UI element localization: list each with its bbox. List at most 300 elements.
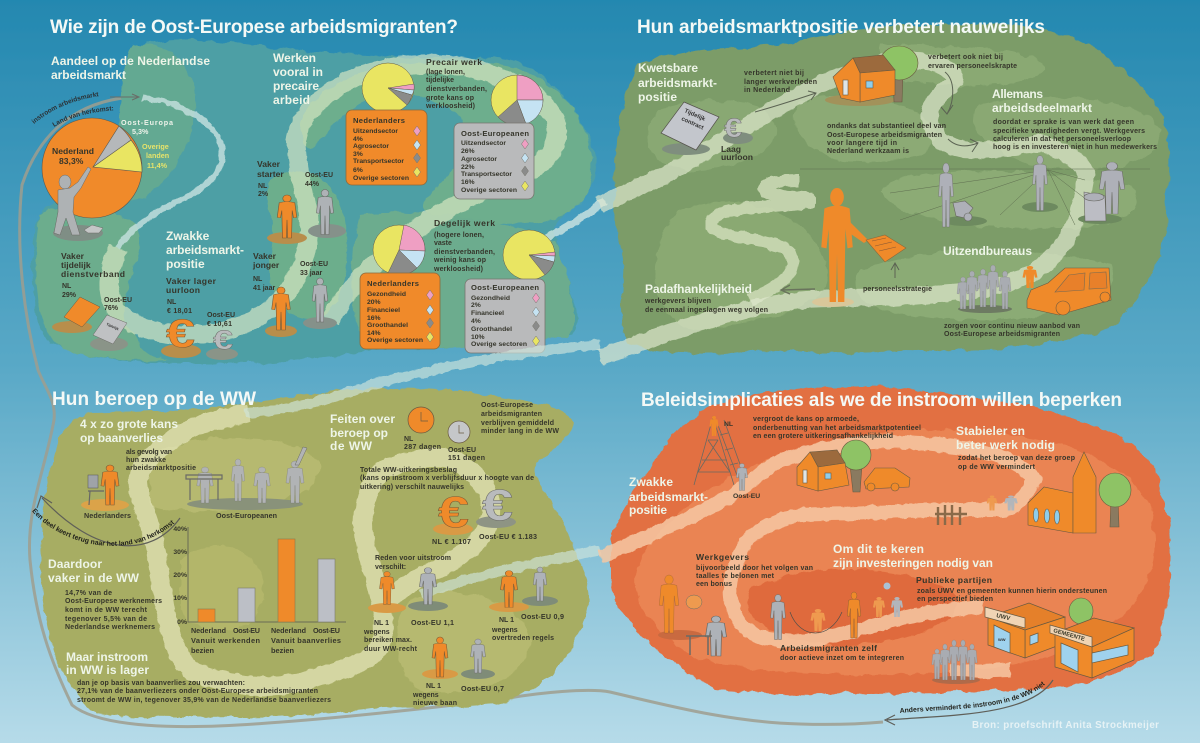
- icon: UWV building: [985, 603, 1065, 658]
- bar chart: 40%: [173, 526, 187, 533]
- text: verbetert ook niet: ervaren personeelskrapte: [928, 63, 1017, 70]
- text: degelijk werk: (hogere lonen,: [434, 232, 484, 239]
- icon: UWV building: WW: [998, 637, 1006, 642]
- icon: gemeente building: [1050, 618, 1134, 678]
- box: Nederlanders degelijk: Overige sectoren: [367, 337, 423, 344]
- heading: 4x: 4 x zo grote kans: [80, 417, 178, 431]
- icon: euro signs: €: [213, 325, 233, 355]
- icon: tijdelijk contract: contract: [680, 116, 704, 131]
- text: zodat: [958, 455, 1075, 471]
- heading: zwakke arbeidsmarktpositie: arbeidsmarkt-: [166, 243, 244, 257]
- icon: UWV building: UWV: [996, 613, 1011, 622]
- arrow: [948, 139, 978, 152]
- box: Oost-Europeanen precair: [454, 123, 534, 199]
- pie: OE precair: [491, 75, 543, 125]
- text: arbeidsmigranten zelf: [780, 643, 904, 662]
- box: Oost-Europeanen degelijk: Gezondheid: [471, 295, 510, 302]
- text: allemans arbeidsdeelmarkt: Allemans: [992, 87, 1043, 101]
- curved label: land van herkomst: Land van herkomst:: [52, 106, 114, 127]
- box: Nederlanders precair: 6%: [353, 167, 363, 174]
- text: dan je op basis: dan je op basis van baanverlies zou verwachten:: [77, 680, 245, 687]
- text: vaker jonger: [252, 251, 328, 292]
- text: padafhankelijkheid: Padafhankelijkheid: [645, 282, 752, 296]
- text: vaker tijdelijk dienstverband: 29%: [62, 292, 77, 299]
- icon: jump rope: [770, 592, 861, 640]
- title: Hun beroep op de WW: [52, 389, 256, 410]
- icon: church and tree: [1028, 452, 1131, 533]
- text: publieke partijen: [916, 575, 1107, 603]
- brush path: [600, 60, 1086, 357]
- brush: light stripes: [245, 345, 600, 595]
- text: euro amounts: NL € 1.107: [432, 537, 471, 546]
- text: vaker starter: NL: [258, 183, 268, 190]
- text: werkgevers: [696, 552, 813, 588]
- text: vaker jonger: 41 jaar: [253, 285, 275, 292]
- box: Nederlanders precair: Transportsector: [353, 158, 404, 165]
- labels: NL and Oost-EU: [724, 421, 760, 500]
- text: overtreden: overtreden regels: [492, 635, 554, 642]
- text: nieuwe baan: nieuwe baan: [413, 700, 457, 707]
- text: vaker jonger: Oost-EU: [300, 261, 328, 268]
- icon: figures nieuwe baan: [422, 637, 495, 679]
- heading: kwetsbare arbeidsmarktpositie: [638, 61, 717, 104]
- text: dan je op basis: [77, 680, 331, 704]
- pie labels: 11,4%: [147, 161, 168, 170]
- icon: tree behind buildings: [1069, 598, 1093, 633]
- box: Nederlanders degelijk: Groothandel: [367, 322, 408, 329]
- text: publieke partijen: zoals UWV en gemeenten kunnen hierin ondersteunen: [917, 588, 1107, 595]
- horizon and rays: [800, 169, 1150, 225]
- box: Oost-Europeanen degelijk: [465, 279, 545, 353]
- text: vaker lager uurloon: Vaker lager: [166, 276, 217, 286]
- box: Nederlanders precair: Overige sectoren: [353, 175, 409, 182]
- heading: feiten: Feiten over: [330, 412, 395, 426]
- text: euro amounts: [432, 532, 537, 546]
- heading: kwetsbare arbeidsmarktpositie: Kwetsbare: [638, 61, 698, 75]
- text: personeelsstrategie: personeelsstrategie: [863, 286, 932, 293]
- text: zodat: zodat het beroep van deze groep: [958, 455, 1075, 462]
- text: vaker tijdelijk dienstverband: dienstverband: [61, 269, 125, 279]
- text: als gevolg: arbeidsmarktpositie: [126, 465, 196, 472]
- text: dagen: Oost-EU: [448, 447, 476, 454]
- text: max duur: duur WW-recht: [364, 646, 418, 653]
- icon: figures jonger: [265, 278, 337, 337]
- heading: stabieler: [956, 424, 1055, 452]
- text: padafhankelijkheid: [644, 282, 768, 314]
- heading: zwakke arbeidsmarktpositie: Zwakke: [629, 475, 673, 489]
- panel: beleidsimplicaties: [597, 384, 1172, 731]
- text: allemans arbeidsdeelmarkt: specifieke vaardigheden vergt. Werkgevers: [993, 128, 1145, 135]
- text: dagen: 151 dagen: [448, 455, 485, 462]
- heading: maar instroom: [66, 650, 149, 677]
- text: vaker lager uurloon: [166, 276, 235, 328]
- text: overtreden: wegens: [491, 627, 518, 634]
- text: vergroot de kans: onderbenutting van het arbeidsmarktpotentieel: [753, 425, 921, 432]
- box: Oost-Europeanen precair: Uitzendsector: [461, 140, 506, 147]
- arrow: [941, 72, 953, 114]
- text: 14,7%: Nederlandse werknemers: [65, 624, 155, 631]
- text: laag uurloon: [721, 144, 753, 162]
- text: max duur: [363, 618, 454, 653]
- heading: zwakke arbeidsmarktpositie: Zwakke: [166, 229, 210, 243]
- heading: aandeel: [51, 54, 210, 82]
- text: totale ww-uitkeringsbeslag: [360, 467, 534, 491]
- bar chart: 10%: [173, 595, 187, 602]
- bar chart: Nederland: [271, 626, 306, 635]
- text: oost-europese verblijven: minder lang in de WW: [481, 428, 559, 435]
- text: publieke partijen: en perspectief bieden: [917, 596, 993, 603]
- label: Oost-Europeanen: Oost-Europeanen: [216, 511, 277, 520]
- text: oost-europese verblijven: verblijven gemiddeld: [481, 420, 554, 427]
- text: dan je op basis: stroomt de WW in, tegenover 35,9% van de Nederlandse baanverliezers: [77, 697, 331, 704]
- icon: contracts: Tijdelijk: [106, 322, 119, 331]
- text: zorgen voor: zorgen voor continu nieuw aanbod van: [944, 323, 1080, 330]
- heading: zwakke arbeidsmarktpositie: arbeidsmarkt-: [629, 490, 708, 504]
- arrow band: anders: [885, 680, 1053, 725]
- box: Oost-Europeanen degelijk: 10%: [471, 334, 485, 341]
- text: vaker starter: [257, 159, 333, 198]
- icon: euro signs: [161, 312, 238, 360]
- text: als gevolg: [126, 449, 196, 472]
- icon: euro signs: €: [166, 312, 195, 356]
- text: padafhankelijkheid: werkgevers blijven: [644, 298, 711, 305]
- text: verbetert niet bij: in Nederland: [744, 87, 790, 94]
- box: Oost-Europeanen degelijk: 2%: [471, 302, 481, 309]
- text: nieuwe baan: NL 1: [426, 683, 441, 690]
- box: Nederlanders degelijk: 14%: [367, 330, 381, 337]
- box: Oost-Europeanen degelijk: Overige sectoren: [471, 341, 527, 348]
- icon: dutch worker at desk: [81, 465, 129, 511]
- brush: winding road: [711, 180, 811, 300]
- text: reden voor uitstroom: verschilt:: [375, 564, 406, 571]
- icon: euro: [723, 113, 753, 144]
- heading: werken vooral in precaire arbeid: arbeid: [273, 93, 310, 107]
- text: precair werk: (lage lonen,: [426, 69, 465, 76]
- box: Oost-Europeanen precair: 26%: [461, 148, 475, 155]
- box: Oost-Europeanen precair: Overige sectoren: [461, 187, 517, 194]
- icon: employer and worker at laptop: [658, 575, 726, 656]
- pie chart: land van herkomst: [42, 118, 142, 218]
- text: vaker lager uurloon: Oost-EU: [207, 312, 235, 319]
- text: vaker lager uurloon: uurloon: [166, 285, 200, 295]
- text: degelijk werk: Degelijk werk: [434, 218, 495, 228]
- heading: maar instroom: in WW is lager: [66, 663, 149, 677]
- box: Oost-Europeanen degelijk: Financieel: [471, 310, 504, 317]
- heading: zwakke arbeidsmarktpositie: positie: [166, 257, 205, 271]
- icon: euros: €: [438, 488, 469, 537]
- title: Hun arbeidsmarktpositie verbetert nauwelijks: [637, 17, 1045, 38]
- text: allemans arbeidsdeelmarkt: hoog is en investeren niet in hun medewerkers: [993, 144, 1157, 151]
- source: Bron: proefschrift Anita Strockmeijer: [972, 720, 1159, 731]
- pie: OE degelijk: [503, 230, 555, 280]
- box: Oost-Europeanen precair: Oost-Europeanen: [461, 129, 529, 138]
- text: precair werk: Precair werk: [426, 57, 482, 67]
- text: degelijk werk: weinig kans op: [433, 257, 486, 264]
- text: vaker tijdelijk dienstverband: [61, 251, 132, 312]
- text: dagen: NL: [404, 436, 414, 443]
- icon: big orange man with plan: [812, 188, 906, 307]
- labels: NL and Oost-EU: NL: [724, 421, 733, 428]
- text: nieuwe baan: Oost-EU 0,7: [461, 684, 504, 693]
- text: vergroot de kans: [753, 416, 921, 440]
- icon: fence and dancers: [935, 496, 1018, 525]
- pie: NL degelijk: [373, 225, 425, 275]
- icon: house tree car: [797, 440, 910, 492]
- icon: tijdelijk contract: [661, 102, 719, 155]
- text: vaker lager uurloon: € 10,61: [207, 321, 232, 328]
- text: verbetert ook niet: [928, 54, 1017, 70]
- icon: tijdelijk contract: Tijdelijk: [683, 108, 707, 123]
- heading: om dit te keren: Om dit te keren: [833, 542, 924, 556]
- heading: om dit te keren: [833, 542, 993, 570]
- box: Oost-Europeanen precair: 22%: [461, 164, 475, 171]
- text: zorgen voor: [944, 323, 1080, 338]
- text: laag uurloon: Laag: [721, 144, 741, 154]
- bar chart: 0%: [177, 619, 187, 626]
- icon: workers: [938, 156, 1125, 227]
- brush path: [138, 413, 491, 686]
- box: Oost-Europeanen precair: Transportsector: [461, 171, 512, 178]
- pie labels: [52, 118, 174, 170]
- text: vaker starter: Oost-EU: [305, 172, 333, 179]
- heading: stabieler: Stabieler en: [956, 424, 1025, 438]
- text: max duur: wegens: [363, 629, 390, 636]
- heading: feiten: beroep op: [330, 426, 388, 440]
- text: degelijk werk: dienstverbanden,: [434, 249, 495, 256]
- text: vaker tijdelijk dienstverband: Oost-EU: [104, 297, 132, 304]
- panel background blob: [32, 40, 597, 364]
- text: vaker tijdelijk dienstverband: tijdelijk: [61, 260, 91, 270]
- text: precair werk: [425, 57, 487, 110]
- icon: children with ball: [873, 582, 903, 617]
- text: 14,7%: 14,7% van de: [65, 590, 112, 597]
- arrow: [755, 91, 816, 112]
- text: ondanks: Oost-Europese arbeidsmigranten: [827, 132, 942, 139]
- bar chart: Oost-EU: [313, 626, 340, 635]
- text: verbetert niet bij: langer werkverleden: [744, 79, 817, 86]
- arrow: instroom: [110, 94, 139, 100]
- box: Nederlanders degelijk: Financieel: [367, 307, 400, 314]
- heading: feiten: de WW: [330, 439, 373, 453]
- bar chart: [173, 526, 346, 655]
- text: ondanks: Nederland werkzaam is: [827, 148, 909, 155]
- text: overtreden: [491, 612, 564, 642]
- text: totale ww-uitkeringsbeslag: (kans op instroom x verblijfsduur x hoogte van de: [360, 475, 534, 482]
- brush: connecting stripe: [530, 200, 605, 245]
- text: laag uurloon: uurloon: [721, 152, 753, 162]
- label: Nederlanders: Nederlanders: [84, 511, 131, 520]
- text: overtreden: NL 1: [499, 617, 514, 624]
- icon: group of workers: [957, 265, 1012, 313]
- heading: werken vooral in precaire arbeid: vooral in: [273, 65, 323, 79]
- title: Wie zijn de Oost-Europese arbeidsmigranten?: [50, 17, 458, 38]
- heading: zwakke arbeidsmarktpositie: positie: [629, 503, 667, 517]
- box: Oost-Europeanen degelijk: Groothandel: [471, 326, 512, 333]
- icon: ladder: [694, 416, 748, 490]
- text: werkgevers: Werkgevers: [696, 552, 749, 562]
- panel: beroep op de WW: [32, 338, 601, 719]
- text: dagen: [404, 436, 485, 462]
- heading: daardoor: Daardoor: [48, 557, 102, 571]
- icon: orange van: [1022, 266, 1111, 315]
- text: werkgevers: bijvoorbeeld door het volgen van: [696, 565, 813, 572]
- text: verbetert niet bij: verbetert niet bij: [744, 70, 804, 77]
- text: precair werk: werkloosheid): [425, 103, 475, 110]
- text: werkgevers: een bonus: [696, 581, 732, 588]
- text: verbetert niet bij: [744, 70, 817, 94]
- bar chart: bezien: [271, 646, 294, 655]
- text: oost-europese verblijven: arbeidsmigranten: [481, 411, 542, 418]
- text: vaker jonger: jonger: [252, 260, 280, 270]
- text: allemans arbeidsdeelmarkt: [992, 87, 1157, 151]
- box: Nederlanders precair: 4%: [353, 136, 363, 143]
- panel: arbeidsmarktpositie: [600, 17, 1169, 357]
- heading: stabieler: beter werk nodig: [956, 438, 1055, 452]
- labels: NL and Oost-EU: Oost-EU: [733, 493, 760, 500]
- text: precair werk: tijdelijke: [426, 77, 454, 84]
- text: vaker tijdelijk dienstverband: 76%: [104, 305, 119, 312]
- icon: euro: €: [724, 113, 742, 143]
- heading: feiten: [330, 412, 395, 453]
- text: vaker jonger: Vaker: [253, 251, 277, 261]
- box: Oost-Europeanen degelijk: 4%: [471, 318, 481, 325]
- arrow: personeelsstrategie: [891, 263, 899, 278]
- river line: [20, 97, 883, 727]
- box: Nederlanders degelijk: [360, 273, 440, 349]
- brush: thin upper stroke: [118, 98, 222, 248]
- text: arbeidsmigranten zelf: door actieve inzet om te integreren: [780, 655, 904, 662]
- heading: werken vooral in precaire arbeid: precaire: [273, 79, 319, 93]
- title: Beleidsimplicaties als we de instroom willen beperken: [641, 390, 1122, 411]
- bar chart: Vanuit werkenden: [191, 636, 260, 645]
- icon: east european workers: [186, 447, 307, 510]
- text: totale ww-uitkeringsbeslag: uitkering) verschilt nauwelijks: [360, 484, 464, 491]
- icon: man painting the pie: [53, 167, 103, 241]
- icon: group of people: [932, 640, 980, 684]
- box: Nederlanders degelijk: 16%: [367, 315, 381, 322]
- icon: house and tree: [825, 46, 918, 106]
- text: reden voor uitstroom: [375, 555, 451, 571]
- box: Nederlanders degelijk: 20%: [367, 299, 381, 306]
- text: vergroot de kans: en een grotere uitkeringsafhankelijkheid: [753, 433, 893, 440]
- pie labels: 83,3%: [59, 156, 84, 166]
- text: degelijk werk: [433, 218, 495, 273]
- heading: om dit te keren: zijn investeringen nodig van: [833, 556, 993, 570]
- text: vaker jonger: 33 jaar: [300, 270, 322, 277]
- curved label: anders: Anders vermindert de instroom in de WW niet: [900, 682, 1045, 713]
- heading: zwakke arbeidsmarktpositie: [629, 475, 708, 517]
- heading: 4x: op baanverlies: [80, 431, 163, 445]
- box: Oost-Europeanen degelijk: Oost-Europeanen: [471, 283, 539, 292]
- text: als gevolg: als gevolg van: [126, 449, 172, 456]
- text: degelijk werk: vaste: [434, 240, 452, 247]
- heading: uitzendbureaus: Uitzendbureaus: [943, 244, 1032, 258]
- text: allemans arbeidsdeelmarkt: doordat er sprake is van werk dat geen: [993, 119, 1134, 126]
- text: ondanks: [827, 123, 946, 155]
- text: vaker tijdelijk dienstverband: NL: [62, 283, 72, 290]
- heading: aandeel: arbeidsmarkt: [51, 68, 126, 82]
- box: Nederlanders precair: Uitzendsector: [353, 128, 398, 135]
- icon: contracts: [52, 297, 128, 351]
- pie labels: Overige: [142, 142, 169, 151]
- heading: kwetsbare arbeidsmarktpositie: arbeidsmarkt-: [638, 76, 717, 90]
- text: allemans arbeidsdeelmarkt: calculeren in dat het personeelsverloop: [993, 136, 1131, 143]
- bar chart: Nederland: [191, 626, 226, 635]
- icon: figures max duur: [368, 568, 448, 613]
- text: ondanks: voor langere tijd in: [827, 140, 897, 147]
- arrow: padafhankelijkheid: [781, 285, 815, 294]
- text: zodat: op de WW vermindert: [958, 464, 1036, 471]
- heading: zwakke arbeidsmarktpositie: [166, 229, 244, 271]
- text: vaker starter: starter: [257, 169, 284, 179]
- text: als gevolg: hun zwakke: [126, 457, 166, 464]
- box: Nederlanders precair: [346, 110, 427, 185]
- pie: NL precair: [362, 63, 414, 113]
- bar chart: 20%: [173, 572, 187, 579]
- bar chart: Oost-EU: [233, 626, 260, 635]
- text: nieuwe baan: [412, 683, 504, 707]
- text: vaker lager uurloon: NL: [167, 299, 177, 306]
- text: publieke partijen: Publieke partijen: [916, 575, 992, 585]
- text: vaker starter: 2%: [258, 191, 269, 198]
- icon: clocks: [408, 407, 470, 443]
- heading: daardoor: [48, 557, 140, 585]
- text: dan je op basis: 27,1% van de baanverliezers onder Oost-Europese arbeidsmigranten: [77, 688, 318, 695]
- text: precair werk: dienstverbanden,: [426, 86, 487, 93]
- heading: werken vooral in precaire arbeid: Werken: [273, 51, 316, 65]
- text: vaker starter: 44%: [305, 181, 320, 188]
- text: 14,7%: Oost-Europese werknemers: [65, 598, 162, 605]
- text: vaker jonger: NL: [253, 276, 263, 283]
- heading: werken vooral in precaire arbeid: [273, 51, 323, 107]
- panel background blob: [40, 388, 589, 718]
- box: Oost-Europeanen precair: 16%: [461, 179, 475, 186]
- text: padafhankelijkheid: de eenmaal ingeslagen weg volgen: [645, 307, 768, 314]
- box: Nederlanders precair: 3%: [353, 151, 363, 158]
- text: oost-europese verblijven: Oost-Europese: [481, 402, 533, 409]
- icon: euros: €: [482, 481, 513, 530]
- icon: euros: [433, 481, 516, 537]
- text: reden voor uitstroom: Reden voor uitstroom: [375, 555, 451, 562]
- text: verbetert ook niet: verbetert ook niet bij: [928, 54, 1003, 61]
- text: precair werk: grote kans op: [426, 95, 474, 102]
- text: oost-europese verblijven: [481, 402, 559, 435]
- text: ondanks: ondanks dat substantieel deel van: [827, 123, 946, 130]
- text: allemans arbeidsdeelmarkt: arbeidsdeelmarkt: [992, 101, 1092, 115]
- brush path: [600, 442, 1035, 672]
- text: dagen: 287 dagen: [404, 444, 441, 451]
- box: Nederlanders degelijk: Nederlanders: [367, 279, 419, 288]
- heading: kwetsbare arbeidsmarktpositie: positie: [638, 90, 677, 104]
- text: 14,7%: tegenover 5,5% van de: [65, 616, 147, 623]
- heading: 4x: [80, 417, 178, 445]
- text: totale ww-uitkeringsbeslag: Totale WW-uitkeringsbeslag: [360, 467, 457, 474]
- heading: maar instroom: Maar instroom: [66, 650, 148, 664]
- panel background blob: [614, 24, 1169, 354]
- text: overtreden: Oost-EU 0,9: [521, 612, 564, 621]
- text: arbeidsmigranten zelf: Arbeidsmigranten zelf: [780, 643, 877, 653]
- icon: figures overtreden: [489, 567, 558, 612]
- curved label: instroom: instroom arbeidsmarkt: [31, 92, 99, 124]
- text: vaker lager uurloon: € 18,01: [167, 308, 192, 315]
- brush path: [109, 64, 557, 335]
- pie labels: landen: [146, 151, 169, 160]
- icon: figures starter: [267, 190, 346, 244]
- bar chart: Vanuit baanverlies: [271, 636, 341, 645]
- pie labels: Oost-Europa: [121, 118, 174, 127]
- text: vaker starter: Vaker: [257, 159, 281, 169]
- text: nieuwe baan: wegens: [412, 692, 439, 699]
